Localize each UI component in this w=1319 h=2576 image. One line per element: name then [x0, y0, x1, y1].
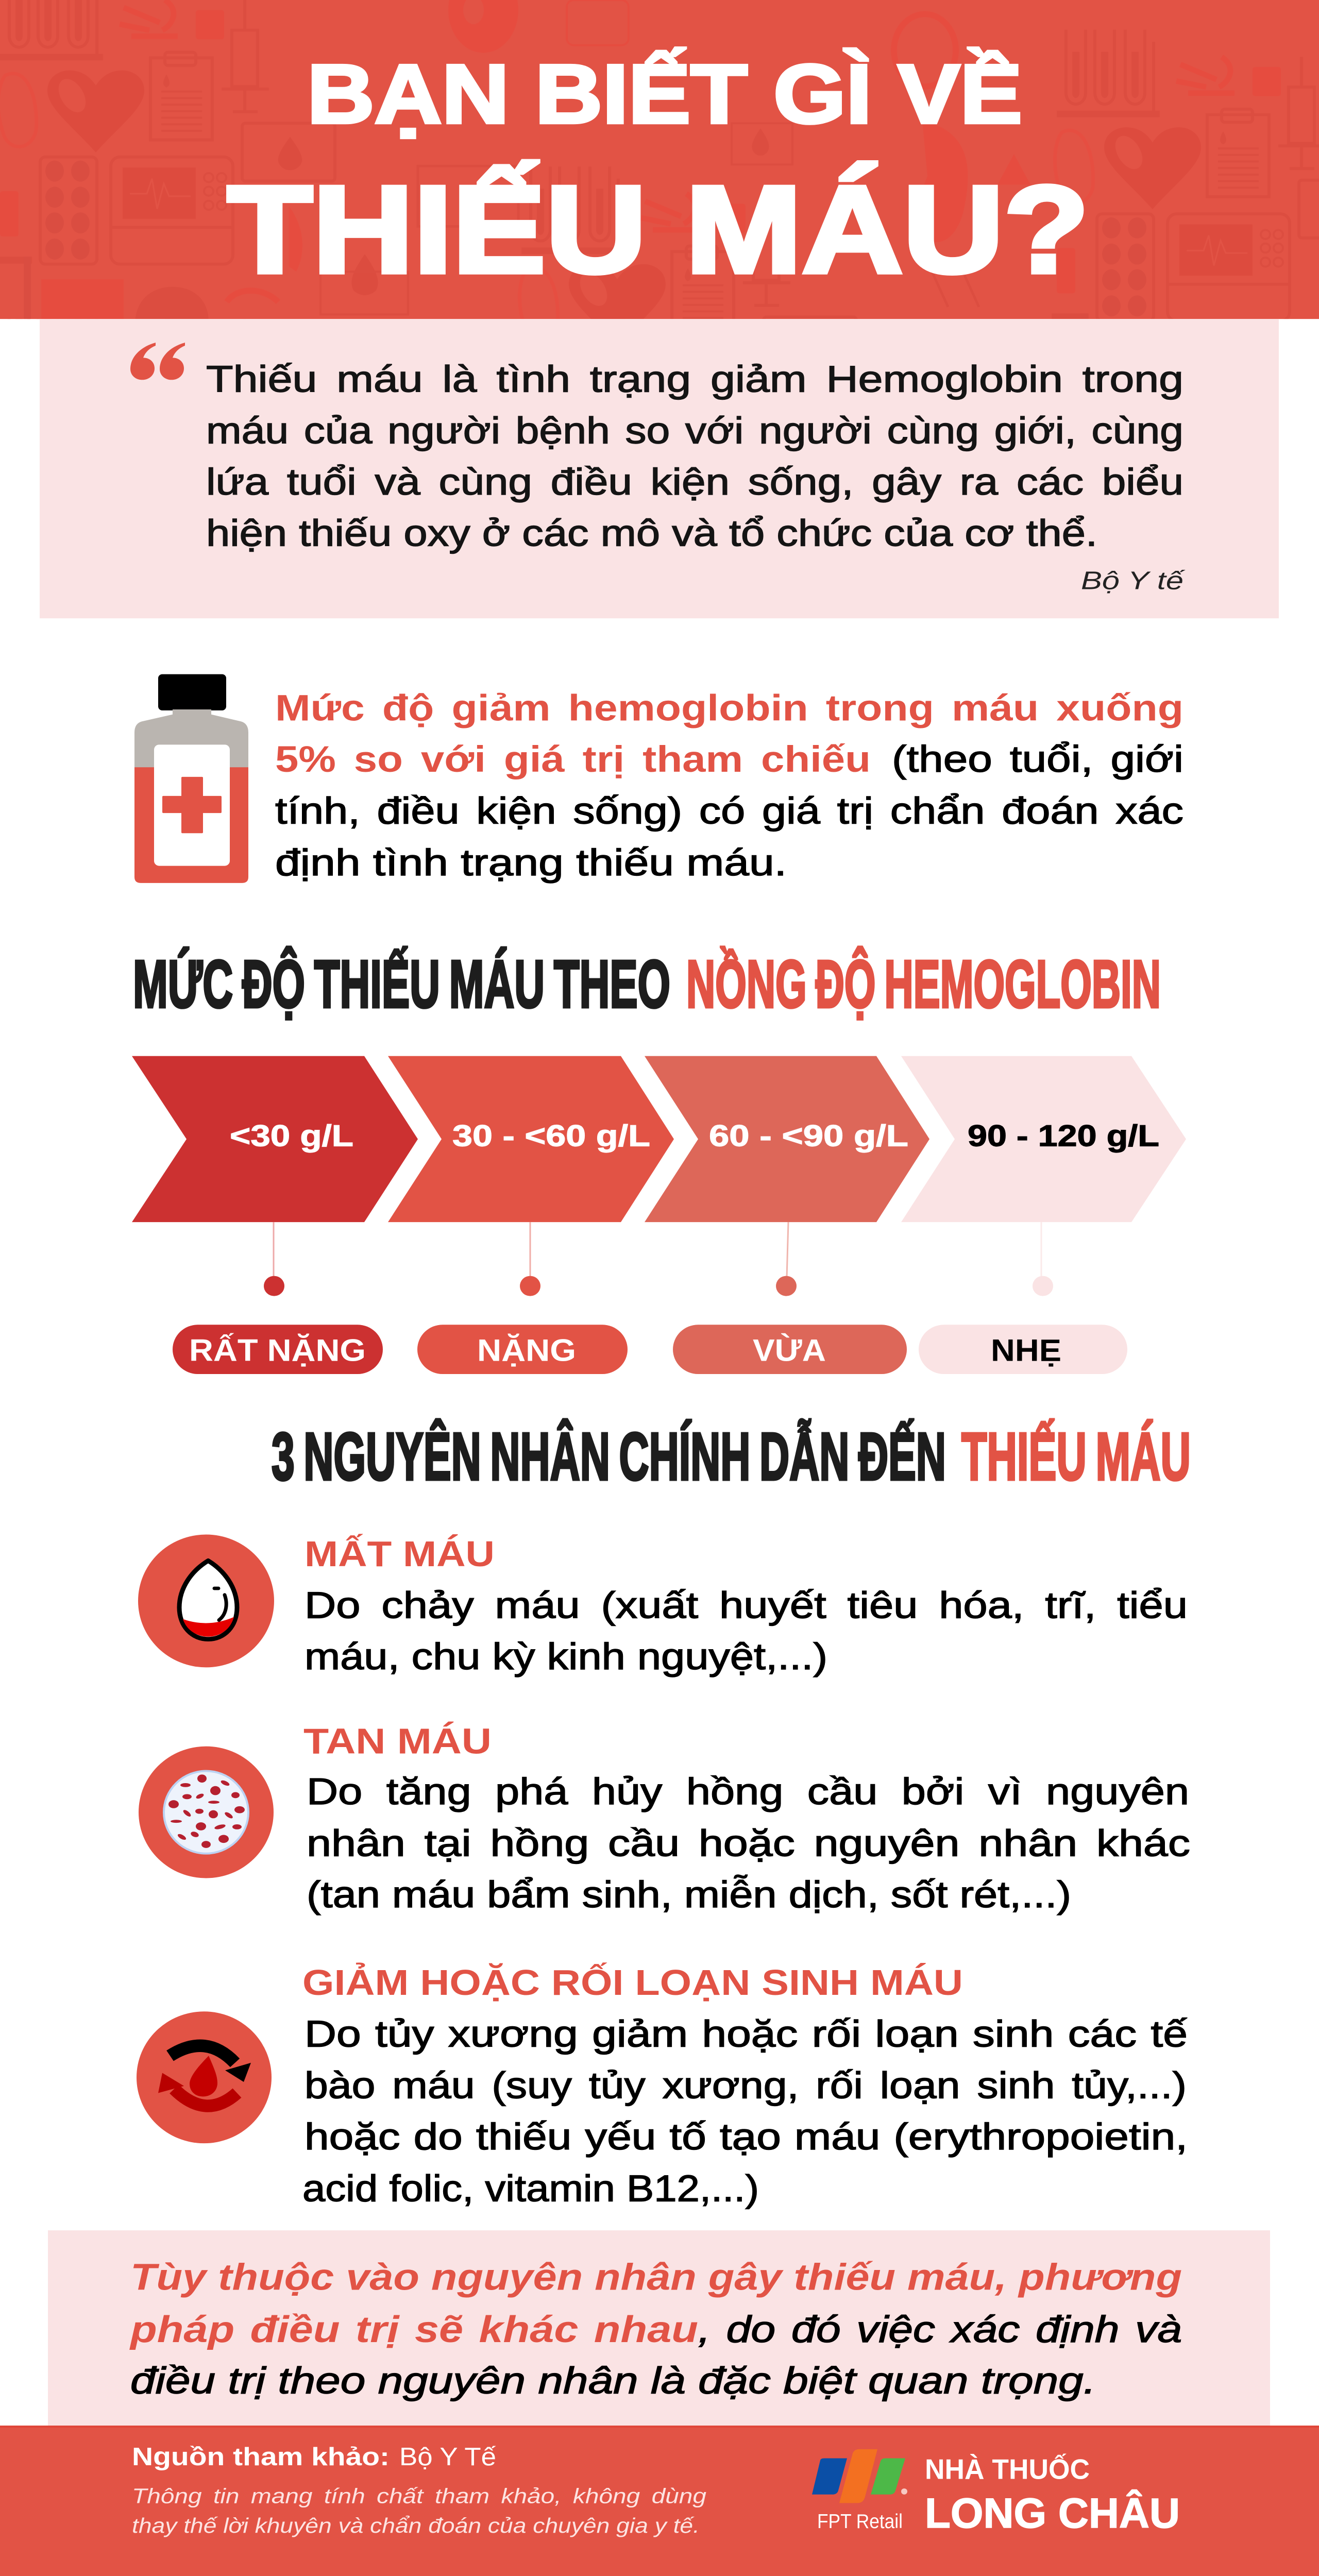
panel: conclusion: điều trị theo nguyên nhân là đặc biệt quan trọng.	[130, 2360, 1096, 2401]
chevron: 60 to 90 g/L: 60 - <90 g/L	[709, 1118, 908, 1153]
disclaimer	[132, 2484, 706, 2537]
logo: Long Chau pharmacy: NHÀ THUỐC	[925, 2453, 1090, 2485]
pill: severe	[417, 1325, 628, 1374]
cause description: Do tủy xương giảm hoặc rối loạn sinh các tế	[305, 2013, 1188, 2055]
source line	[132, 2443, 496, 2471]
heading: severity by hemoglobin: MỨC ĐỘ THIẾU MÁU THEO	[133, 946, 670, 1022]
cause title: GIẢM HOẶC RỐI LOẠN SINH MÁU	[302, 1962, 963, 2003]
cause title: MẤT MÁU	[305, 1534, 495, 1574]
title	[227, 47, 1089, 299]
source line: Bộ Y Tế	[399, 2443, 496, 2471]
cause description: bào máu (suy tủy xương, rối loạn sinh tủy,...)	[305, 2065, 1187, 2106]
text: diagnostic threshold: 5% so với giá trị tham chiếu	[275, 739, 871, 780]
cause description: nhân tại hồng cầu hoặc nguyên nhân khác	[307, 1823, 1190, 1864]
chevron: below 30 g/L	[132, 1056, 418, 1222]
cause 2: hemolysis	[139, 1721, 1190, 1916]
header background	[0, 0, 1319, 319]
cause description: (tan máu bẩm sinh, miễn dịch, sốt rét,...)	[307, 1874, 1071, 1916]
pill: very severe: RẤT NẶNG	[189, 1333, 366, 1367]
cause description	[302, 2013, 1188, 2209]
quote text	[206, 359, 1183, 554]
logo: FPT Retail: FPT Retail	[817, 2511, 903, 2533]
logo: FPT Retail	[812, 2449, 907, 2533]
cause description	[305, 1585, 1188, 1677]
title line 2: THIẾU MÁU?	[227, 160, 1089, 299]
source line: Nguồn tham khảo:	[132, 2443, 390, 2471]
logo: Long Chau pharmacy	[925, 2453, 1180, 2537]
icon: quotation marks	[130, 343, 185, 380]
icon: blood drop	[138, 1535, 274, 1667]
panel: conclusion: Tùy thuộc vào nguyên nhân gây thiếu máu, phương	[130, 2257, 1182, 2298]
pill: mild: NHẸ	[991, 1333, 1061, 1367]
chevron: 30 to 60 g/L: 30 - <60 g/L	[452, 1118, 650, 1153]
chevron: 60 to 90 g/L	[645, 1056, 929, 1222]
quote text: hiện thiếu oxy ở các mô và tổ chức của cơ thể.	[206, 513, 1097, 554]
cause description: acid folic, vitamin B12,...)	[302, 2168, 759, 2209]
text: diagnostic threshold: tính, điều kiện sống) có giá trị chẩn đoán xác	[275, 790, 1183, 832]
text: diagnostic threshold	[275, 688, 1183, 884]
pill: mild	[919, 1325, 1127, 1374]
quote text: máu của người bệnh so với người cùng giới, cùng	[206, 410, 1183, 451]
medical icon pattern	[0, 0, 1319, 319]
disclaimer: thay thế lời khuyên và chẩn đoán của chuyên gia y tế.	[132, 2513, 700, 2537]
panel: conclusion: pháp điều trị sẽ khác nhau	[129, 2309, 698, 2350]
cause 1: blood loss	[138, 1534, 1188, 1677]
quote source: Bộ Y tế	[1081, 567, 1186, 595]
quote text: lứa tuổi và cùng điều kiện sống, gây ra các biểu	[206, 462, 1183, 503]
pill: moderate	[673, 1325, 907, 1374]
chevron: 30 to 60 g/L	[388, 1056, 674, 1222]
chevron: below 30 g/L: <30 g/L	[230, 1118, 353, 1153]
panel: conclusion: , do đó việc xác định và	[698, 2309, 1182, 2350]
icon: blood drop with cycle arrows	[137, 2011, 272, 2143]
severity labels	[173, 1325, 1127, 1374]
disclaimer: Thông tin mang tính chất tham khảo, không dùng	[132, 2484, 706, 2507]
chart: severity chevrons	[132, 1056, 1186, 1222]
text: diagnostic threshold: Mức độ giảm hemoglobin trong máu xuống	[275, 688, 1183, 728]
title line 1: BẠN BIẾT GÌ VỀ	[307, 47, 1022, 141]
cause description: Do chảy máu (xuất huyết tiêu hóa, trĩ, tiểu	[305, 1585, 1188, 1626]
cause description: Do tăng phá hủy hồng cầu bởi vì nguyên	[307, 1771, 1189, 1812]
icon: medicine bottle	[134, 674, 248, 883]
pill: moderate: VỪA	[753, 1333, 826, 1367]
footer	[0, 2426, 1319, 2576]
cause description	[307, 1771, 1190, 1916]
icon: blood cells under microscope	[139, 1747, 274, 1878]
logo: Long Chau pharmacy: LONG CHÂU	[925, 2489, 1180, 2537]
text: diagnostic threshold: định tình trạng thiếu máu.	[275, 842, 787, 884]
panel: definition quote	[40, 319, 1279, 618]
cause description: máu, chu kỳ kinh nguyệt,...)	[305, 1636, 827, 1677]
pill: severe: NẶNG	[477, 1333, 576, 1367]
pill: very severe	[173, 1325, 383, 1374]
cause description: hoặc do thiếu yếu tố tạo máu (erythropoietin,	[305, 2116, 1188, 2158]
text: diagnostic threshold: (theo tuổi, giới	[892, 739, 1183, 780]
chevron: 90 to 120 g/L	[901, 1056, 1186, 1222]
quote text: Thiếu máu là tình trạng giảm Hemoglobin trong	[206, 359, 1183, 400]
connectors and dots	[264, 1222, 1053, 1296]
panel: conclusion	[48, 2230, 1270, 2428]
cause 3: impaired blood production	[137, 1962, 1188, 2209]
chevron: 90 to 120 g/L: 90 - 120 g/L	[968, 1118, 1159, 1153]
cause title: TAN MÁU	[303, 1721, 492, 1761]
